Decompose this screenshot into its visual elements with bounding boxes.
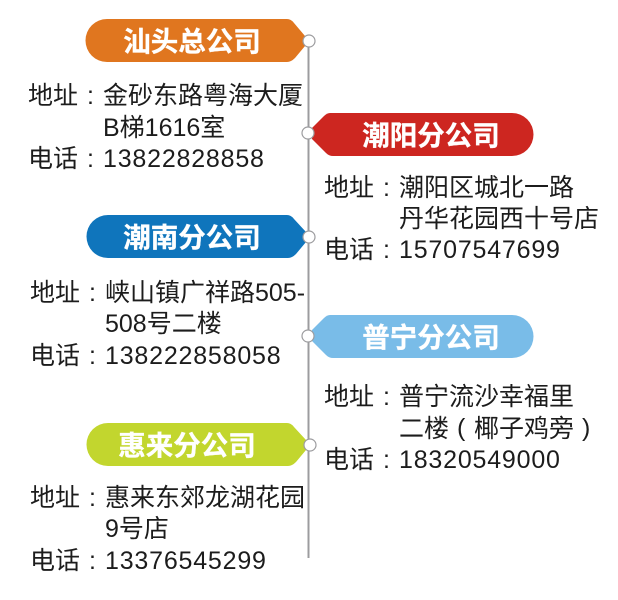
text block: Shantou details: :	[87, 82, 94, 110]
text block: Chaonan details: :	[89, 342, 96, 370]
heading: Shantou head office: 汕头总公司	[123, 26, 261, 57]
text block: Huilai details	[30, 484, 305, 575]
text block: Chaonan details: 峡山镇广祥路505-	[105, 279, 305, 307]
text block: Huilai details: 地址	[30, 484, 80, 512]
text block: Chaonan details	[30, 279, 305, 370]
text block: Chaoyang details: :	[383, 236, 390, 264]
text block: Chaoyang details: 15707547699	[399, 236, 561, 264]
text block: Huilai details: :	[89, 547, 96, 575]
text block: Shantou details: B梯1616室	[103, 114, 225, 142]
text block: Chaonan details: 电话	[30, 342, 80, 370]
pill: Puning	[312, 315, 534, 358]
text block: Huilai details: 13376545299	[105, 547, 267, 575]
heading: Huilai branch: 惠来分公司	[118, 430, 256, 461]
heading: Chaoyang branch: 潮阳分公司	[362, 120, 500, 151]
text block: Chaoyang details: 地址	[324, 174, 374, 202]
text block: Puning details: 地址	[324, 383, 374, 411]
text block: Puning details	[324, 383, 590, 474]
text block: Chaonan details: 138222858058	[105, 342, 281, 370]
text block: Chaoyang details: 丹华花园西十号店	[399, 205, 599, 233]
text block: Puning details: :	[383, 383, 390, 411]
heading: Puning branch: 普宁分公司	[362, 322, 500, 353]
text block: Shantou details	[28, 82, 303, 173]
text block: Puning details: 椰子鸡旁	[474, 415, 574, 443]
text block: Huilai details: 9号店	[105, 515, 169, 543]
pill: Chaoyang	[312, 113, 534, 156]
text block: Huilai details: :	[89, 484, 96, 512]
timeline nodes	[302, 35, 316, 451]
text block: Puning details: 电话	[324, 446, 374, 474]
text block: Puning details: (	[457, 414, 465, 442]
text block: Chaonan details: 508号二楼	[105, 310, 222, 338]
text block: Chaoyang details: 电话	[324, 236, 374, 264]
pill: Chaonan	[86, 215, 306, 258]
timeline line	[308, 41, 310, 558]
text block: Shantou details: :	[87, 145, 94, 173]
text block: Chaonan details: :	[89, 279, 96, 307]
text block: Huilai details: 惠来东郊龙湖花园	[105, 484, 305, 512]
heading: Chaonan branch: 潮南分公司	[123, 222, 261, 253]
text block: Chaoyang details: 潮阳区城北一路	[399, 174, 574, 202]
text block: Shantou details: 13822828858	[103, 145, 265, 173]
text block: Puning details: :	[383, 446, 390, 474]
text block: Huilai details: 电话	[30, 547, 80, 575]
text block: Chaoyang details	[324, 174, 599, 264]
text block: Puning details: 18320549000	[399, 446, 561, 474]
text block: Puning details: 二楼	[399, 415, 449, 443]
text block: Shantou details: 金砂东路粤海大厦	[103, 82, 303, 110]
text block: Shantou details: 地址	[28, 82, 78, 110]
text block: Puning details: )	[582, 414, 590, 442]
text block: Chaoyang details: :	[383, 174, 390, 202]
pill: Huilai	[86, 423, 306, 466]
text block: Shantou details: 电话	[28, 145, 78, 173]
pill: Shantou	[86, 19, 305, 62]
text block: Puning details: 普宁流沙幸福里	[399, 383, 574, 411]
text block: Chaonan details: 地址	[30, 279, 80, 307]
